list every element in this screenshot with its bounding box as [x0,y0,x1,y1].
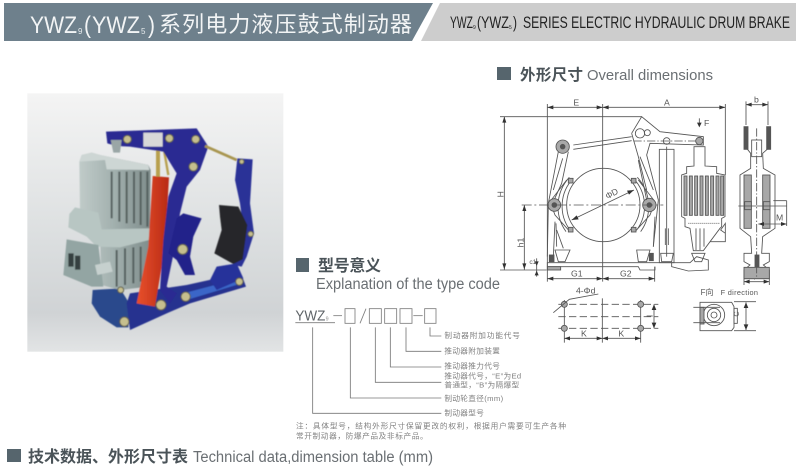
plan and F direction views [553,285,758,343]
section heading: technical data [7,447,433,466]
photo: blue upper lever and arm [106,128,208,303]
push rod column [659,149,674,263]
photo: lower clevis [92,288,129,327]
dimension labels: F [704,118,709,128]
bolt pattern plan view: K [618,328,624,338]
model code boxes: YWZ [295,308,325,324]
code meanings: 制动器型号 [444,408,484,418]
type code explanation diagram [295,308,566,441]
note: 常开制动器，防爆产品及非标产品。 [296,431,428,441]
code meanings: 制动器附加功能代号 [444,330,521,340]
section heading: technical data: 技术数据、外形尺寸表 [28,447,188,466]
header: dark title band: ) [148,12,155,39]
front elevation drawing with dimensions [495,95,787,285]
header: light English band: ( [477,13,481,32]
dimension labels: M [776,213,783,223]
dimension labels: G2 [620,268,632,278]
model code boxes [295,308,436,324]
dimension labels: A [664,97,670,107]
header: light English band: 5 [509,25,512,31]
F direction view: C [732,311,741,317]
photo: base plate [127,275,246,330]
header: dark title band: YWZ [30,12,77,39]
dimension labels [495,95,783,281]
code meanings: 推动器推力代号 [444,361,500,371]
dimension labels: E [573,97,579,107]
dimension labels: H [495,191,505,197]
photo: black brake pad [214,205,247,264]
dimension lines [500,104,725,282]
left arm [547,152,568,257]
note: 注：具体型号，结构外形尺寸保留更改的权利，根据用户需要可生产各种 [296,421,566,431]
dimension labels: b [754,95,759,105]
section heading: overall dimensions: 外形尺寸 [520,65,583,84]
code meanings: 推动器代号，“E”为Ed [444,371,522,381]
header: dark title band: YWZ [92,12,140,39]
brake shoes [550,177,655,232]
header: dark title band [4,3,433,41]
section heading: type code: Explanation of the type code [316,276,500,293]
header: dark title band: 9 [78,27,83,36]
thruster motor [682,147,725,251]
header: dark title band: ( [84,12,91,39]
code meanings: 普通型，“B”为隔爆型 [444,379,519,389]
side elevation [738,101,787,285]
code meanings [444,330,522,418]
model code boxes: 9 [326,316,329,322]
dimension labels: h1 [515,238,525,247]
photo: bolts [118,134,253,326]
dimension labels: ΦD [604,186,620,201]
section heading: type code: 型号意义 [318,256,381,275]
leader lines [313,327,441,413]
product photo [27,93,283,352]
photo: left brake shoe [168,213,202,275]
note [296,421,566,441]
right arm [638,157,655,247]
F direction view: F direction [721,288,758,297]
lever [632,117,703,247]
header: light English band: ) [513,13,517,32]
header: light English band: YWZ [450,13,473,32]
F direction view: F向 [701,287,714,297]
header banner [4,3,796,41]
dimension labels: G1 [571,268,583,278]
code meanings: 推动器附加装置 [444,346,500,356]
section heading: overall dimensions [497,65,713,84]
code meanings: 制动轮直径(mm) [444,393,504,403]
photo: right arm and link [205,146,237,160]
base [547,257,708,271]
dimension labels: F [753,271,759,281]
header: light English band: 9 [473,25,476,31]
lower pivots [555,230,705,262]
header: dark title band: 5 [141,27,146,36]
section heading: overall dimensions: Overall dimensions [587,68,713,84]
dimension labels: c1 [529,259,537,266]
F direction view [693,287,758,331]
bolt pattern plan view: K [581,328,587,338]
drum circle [567,168,640,242]
photo: motor housing [79,153,151,290]
bolt pattern plan view [553,285,658,343]
header: light English band [421,3,796,41]
section heading: technical data: Technical data,dimension table (mm) [193,449,433,466]
bolt pattern plan view: 4-Φd [576,285,596,295]
section heading: type code [296,256,500,293]
header: light English band: YWZ [481,13,509,32]
header: dark title band: 系列电力液压鼓式制动器 [159,12,412,37]
photo: red cylinder [137,176,169,307]
